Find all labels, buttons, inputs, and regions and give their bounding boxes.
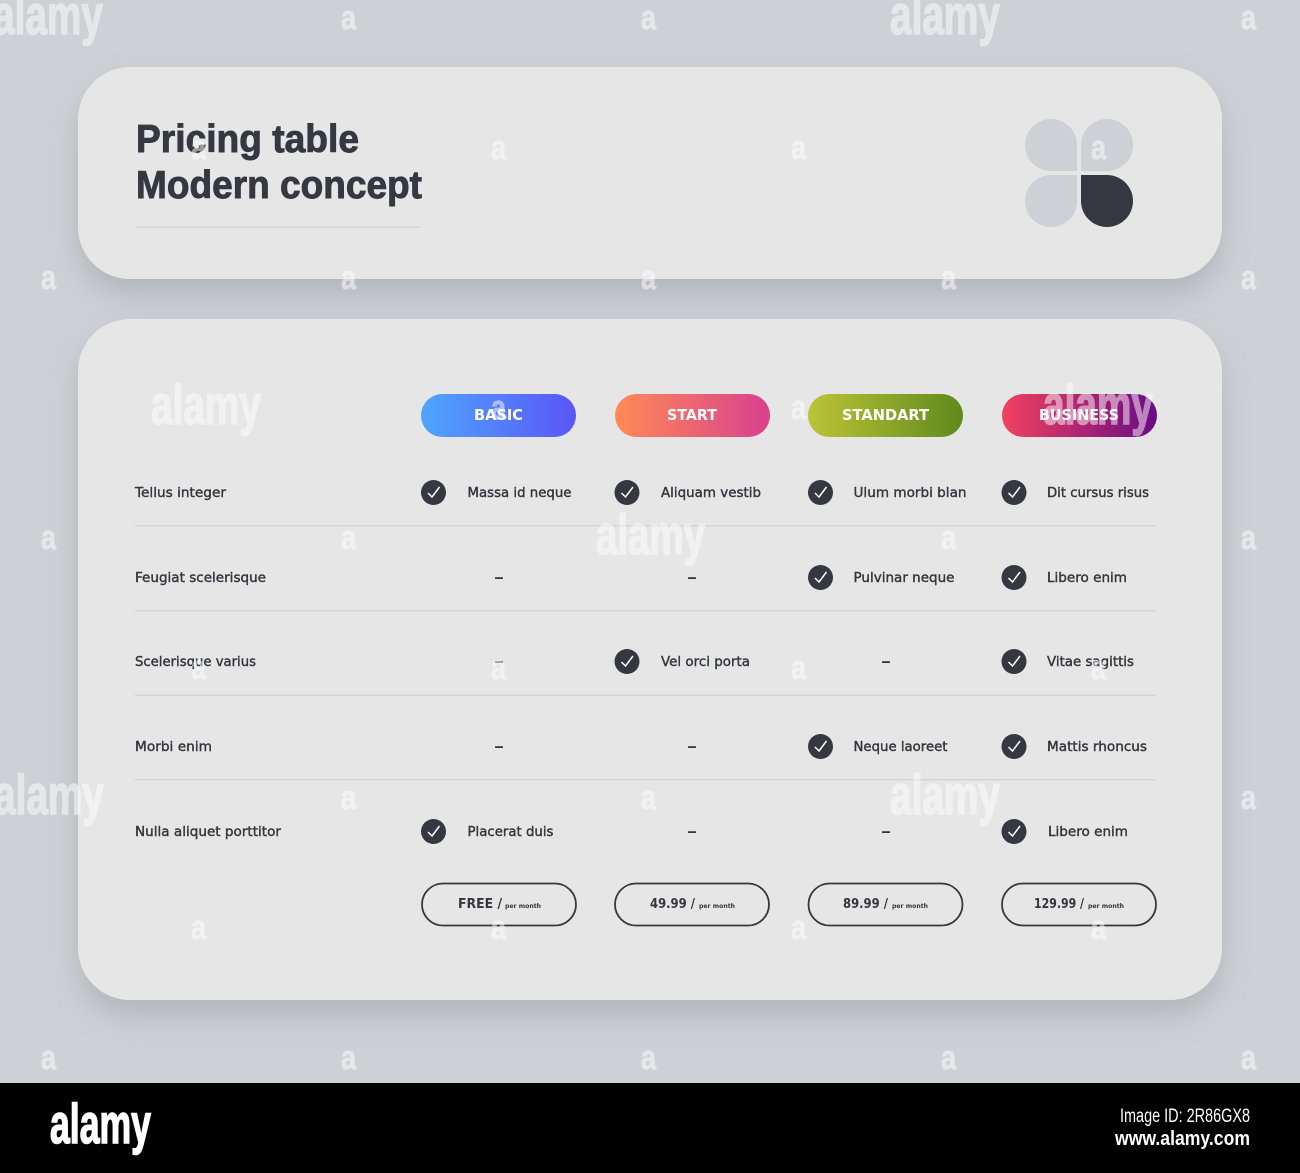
watermarks: alamy — [151, 373, 261, 436]
column: standart — [808, 480, 966, 840]
column: business: Vitae sagittis — [1047, 654, 1134, 670]
watermarks: a — [341, 779, 357, 817]
watermarks: a — [941, 1039, 957, 1077]
footer bar — [0, 1083, 1300, 1173]
watermarks: a — [791, 129, 807, 167]
footer bar: Image ID: 2R86GX8 — [1120, 1106, 1250, 1127]
column: business: Dit cursus risus — [1047, 485, 1149, 501]
watermarks: a — [641, 259, 657, 297]
watermarks: a — [191, 909, 207, 947]
price buttons: per month — [892, 902, 928, 910]
price buttons — [422, 884, 1156, 926]
watermarks: a — [1241, 259, 1257, 297]
column: basic: Placerat duis — [468, 824, 554, 840]
plan headers: START — [667, 406, 718, 424]
panel: header card — [78, 67, 1222, 279]
column: business — [1002, 480, 1149, 844]
row labels: Morbi enim — [135, 739, 212, 755]
watermarks: a — [1241, 1039, 1257, 1077]
watermarks: a — [491, 129, 507, 167]
column: basic: – — [494, 654, 504, 670]
watermarks: a — [1241, 779, 1257, 817]
column: standart: – — [881, 824, 891, 840]
footer bar: alamy — [50, 1092, 151, 1155]
column: start: Vel orci porta — [661, 654, 750, 670]
column: basic: – — [494, 739, 504, 755]
watermarks: a — [341, 0, 357, 37]
plan headers: STANDART — [842, 406, 930, 424]
watermarks: a — [341, 1039, 357, 1077]
column: business: Libero enim — [1047, 570, 1127, 586]
watermarks: a — [41, 1039, 57, 1077]
watermarks: a — [791, 389, 807, 427]
watermarks: a — [1091, 649, 1107, 687]
watermarks: a — [341, 519, 357, 557]
footer bar: www.alamy.com — [1114, 1128, 1250, 1150]
column: basic: – — [494, 570, 504, 586]
watermarks: a — [641, 0, 657, 37]
row labels: Tellus integer — [134, 485, 226, 501]
watermarks: a — [341, 259, 357, 297]
watermarks: a — [41, 519, 57, 557]
price buttons: per month — [505, 902, 541, 910]
column: standart: Pulvinar neque — [854, 570, 954, 586]
watermarks: a — [191, 649, 207, 687]
watermarks: a — [1241, 0, 1257, 37]
title — [136, 118, 422, 207]
column: business: Mattis rhoncus — [1047, 739, 1147, 755]
price buttons: per month — [1088, 902, 1124, 910]
watermarks: alamy — [596, 503, 705, 566]
title: Modern concept — [136, 164, 422, 207]
column: start — [614, 480, 761, 840]
watermarks: a — [941, 519, 957, 557]
icon: four-leaf logo — [1025, 119, 1133, 227]
row labels: Nulla aliquet porttitor — [135, 824, 281, 840]
price buttons: per month — [699, 902, 735, 910]
watermarks: a — [1091, 129, 1107, 167]
watermarks: a — [1091, 909, 1107, 947]
watermarks: a — [491, 649, 507, 687]
column: standart: Neque laoreet — [854, 739, 948, 755]
watermarks: alamy — [890, 763, 1000, 826]
row labels — [134, 485, 281, 840]
price buttons: 89.99 / — [843, 897, 888, 912]
column: start: – — [687, 739, 697, 755]
plan headers: BASIC — [474, 406, 523, 424]
watermarks: a — [1241, 519, 1257, 557]
column: business: Libero enim — [1048, 824, 1128, 840]
watermarks: a — [191, 129, 207, 167]
price buttons: 49.99 / — [650, 897, 695, 912]
panel: pricing table card — [78, 319, 1222, 1000]
row labels: Feugiat scelerisque — [135, 570, 266, 586]
plan headers: BUSINESS — [1039, 406, 1119, 424]
price buttons: 129.99 / — [1034, 897, 1084, 912]
watermarks: a — [491, 389, 507, 427]
column: standart: – — [881, 654, 891, 670]
column: start: – — [687, 570, 697, 586]
watermarks: a — [941, 259, 957, 297]
title: Pricing table — [136, 118, 359, 161]
plan headers — [421, 394, 1157, 437]
column: basic — [421, 480, 572, 844]
column: start: Aliquam vestib — [661, 485, 761, 501]
watermarks: a — [491, 909, 507, 947]
watermarks: a — [791, 909, 807, 947]
watermarks: a — [641, 1039, 657, 1077]
column: basic: Massa id neque — [468, 485, 572, 501]
row labels: Scelerisque varius — [135, 654, 256, 670]
column: standart: Ulum morbi blan — [854, 485, 966, 501]
price buttons: FREE / — [458, 897, 502, 912]
watermarks: a — [41, 259, 57, 297]
watermarks: a — [641, 779, 657, 817]
watermarks: a — [791, 649, 807, 687]
watermarks: alamy — [1043, 373, 1153, 436]
column: start: – — [687, 824, 697, 840]
